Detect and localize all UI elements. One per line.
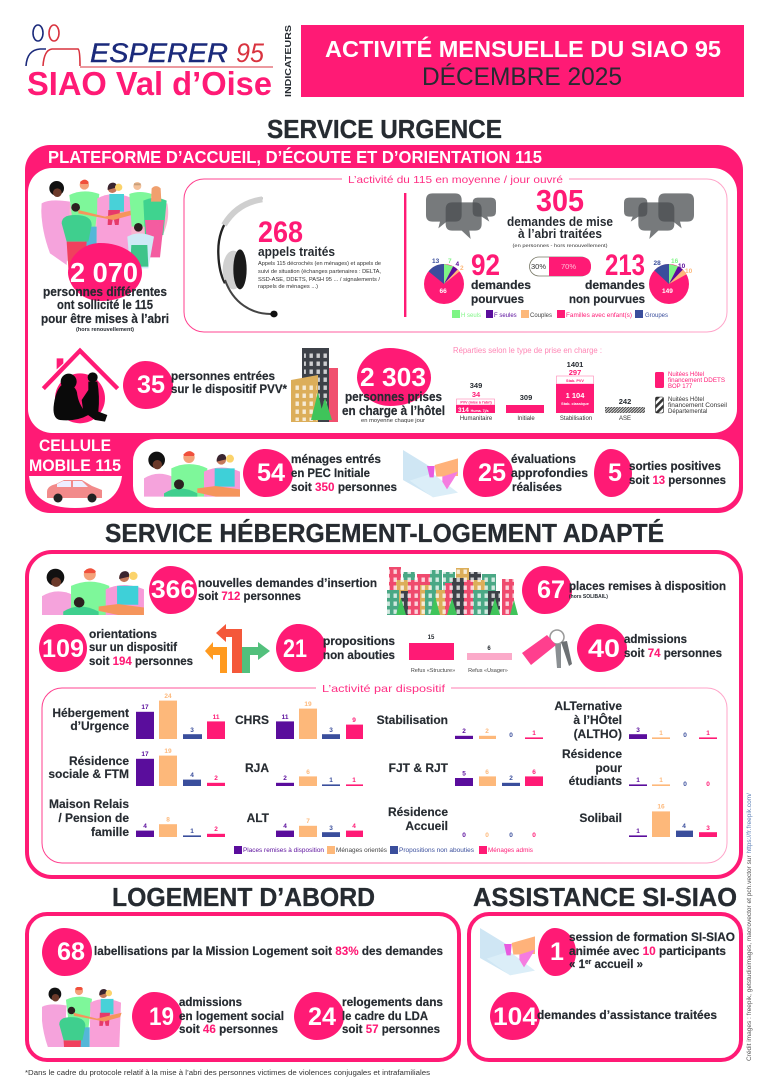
pie chart: demandes pourvues: 66 bbox=[440, 288, 447, 295]
chart: refus: Refus «Structure» bbox=[411, 668, 455, 674]
icon: headset bbox=[218, 198, 278, 317]
chart: répartition par type de prise en charge: 349 bbox=[470, 381, 482, 390]
stat: 305 demandes: demandes de mise bbox=[507, 215, 613, 229]
chart: solibail: 3 bbox=[706, 825, 710, 832]
stat: 305 demandes bbox=[507, 183, 613, 248]
legend: financement hôtel: financement Conseil bbox=[668, 403, 727, 409]
stat: 213 demandes non pourvues: non pourvues bbox=[569, 292, 645, 306]
chart: refus: Refus «Usager» bbox=[468, 668, 508, 674]
gauge: 30% 70%: 30% bbox=[531, 262, 546, 271]
chart: résidence accueil: 0 bbox=[532, 832, 536, 839]
chart: résidence sociale: sociale & FTM bbox=[48, 767, 129, 781]
legend: financement hôtel: Nuitées Hôtel bbox=[668, 397, 704, 403]
chart: répartition par type de prise en charge: 309 bbox=[520, 393, 532, 402]
legend: financement hôtel: Départemental bbox=[668, 409, 707, 415]
stat: 305 demandes: (en personnes - hors renouvellement) bbox=[512, 243, 608, 248]
stat: 109 orientations: orientations bbox=[89, 627, 157, 641]
image credits: Crédit images : freepik, getstudioimages, macrovector et pch.vector sur https://fr.freepik.com/ bbox=[746, 793, 753, 1061]
stat: 35 personnes PVV bbox=[123, 361, 287, 409]
logo: Espérer 95 SIAO Val d'Oise: ESPERER bbox=[90, 38, 228, 68]
chart: stabilisation: 2 bbox=[485, 728, 489, 735]
chart: RJA: 1 bbox=[329, 777, 333, 784]
chart: répartition par type de prise en charge: 34 bbox=[472, 390, 481, 399]
chart: ALTHO: ALTernative bbox=[554, 699, 622, 713]
chart: ALT: ALT bbox=[247, 811, 270, 825]
chart: répartition par type de prise en charge: Initiale bbox=[517, 416, 535, 422]
chart: ALTHO: à l’HÔtel bbox=[573, 712, 622, 727]
chart: CHRS bbox=[235, 701, 363, 739]
icon: laptop bbox=[403, 450, 458, 497]
chart: CHRS: CHRS bbox=[235, 713, 269, 727]
chart: RJA: RJA bbox=[245, 761, 269, 775]
stat: 2 070 personnes: 2 070 bbox=[70, 257, 138, 288]
pie chart: demandes non pourvues: 28 bbox=[654, 260, 661, 267]
stat: 67 places: places remises à disposition bbox=[569, 579, 726, 593]
logo: Espérer 95 SIAO Val d'Oise bbox=[26, 25, 273, 102]
stat: 92 demandes pourvues: pourvues bbox=[471, 292, 524, 306]
legend: ménages: Familles avec enfant(s) bbox=[566, 313, 632, 319]
chart: ALTHO bbox=[554, 699, 717, 741]
chart: hébergement d'urgence: 3 bbox=[190, 727, 194, 734]
legend: financement hôtel: Nuitées Hôtel bbox=[668, 372, 704, 378]
chart: résidence accueil: 0 bbox=[509, 832, 513, 839]
label: indicateurs: INDICATEURS bbox=[283, 25, 293, 97]
chart: résidence pour étudiants bbox=[562, 747, 710, 788]
chart: maison relais: Maison Relais bbox=[49, 797, 129, 811]
chart: ALT: 7 bbox=[306, 818, 310, 825]
pie chart: demandes pourvues: 2 bbox=[460, 265, 464, 272]
gauge: 30% 70%: 70% bbox=[561, 262, 576, 271]
panel: cellule mobile 115 bbox=[29, 436, 739, 508]
panel: logement d'abord bbox=[27, 914, 459, 1064]
stat: 1 session de formation: animée avec 10 participants bbox=[569, 944, 726, 958]
legend: financement hôtel bbox=[655, 372, 727, 415]
chart: résidence pour étudiants: 0 bbox=[706, 781, 710, 788]
pie chart: demandes non pourvues: 16 bbox=[671, 258, 679, 265]
stat: 25 évaluations: évaluations bbox=[511, 452, 576, 466]
stat: 19 admissions: soit 46 personnes bbox=[179, 1022, 278, 1036]
stat: 2 303 personnes à l'hôtel bbox=[342, 348, 445, 424]
pie chart: demandes non pourvues: 149 bbox=[662, 288, 673, 295]
chart: ALT: 3 bbox=[329, 825, 333, 832]
stat: 104 demandes d'assistance: 104 bbox=[493, 1003, 537, 1031]
chart: répartition par type de prise en charge: Humanitaire bbox=[460, 416, 493, 422]
stat: 25 évaluations bbox=[463, 449, 588, 497]
chart: stabilisation: 1 bbox=[532, 730, 536, 737]
chart: ALTHO: (ALTHO) bbox=[574, 727, 622, 741]
chart: maison relais: famille bbox=[91, 825, 129, 839]
chart: CHRS: 19 bbox=[304, 701, 312, 708]
stat: 1 session de formation: « 1 bbox=[569, 957, 586, 971]
stat: 1 session de formation: 1 bbox=[550, 938, 564, 966]
pie chart: demandes non pourvues: 10 bbox=[685, 268, 693, 275]
heading: plateforme 115: PLATEFORME D’ACCUEIL, D’ÉCOUTE ET D’ORIENTATION 115 bbox=[48, 146, 542, 167]
chart: ALT: 4 bbox=[352, 823, 356, 830]
chart: CHRS: 9 bbox=[352, 717, 356, 724]
panel: activité par dispositif bbox=[42, 681, 727, 863]
stat: 68 labellisations: labellisations par la Mission Logement soit 83% des demandes bbox=[94, 944, 443, 958]
heading: service hébergement: SERVICE HÉBERGEMENT-LOGEMENT ADAPTÉ bbox=[105, 519, 664, 548]
icon: hotel buildings bbox=[291, 348, 338, 422]
panel: assistance SI-SIAO bbox=[469, 914, 741, 1060]
panel: activité 115 moyenne bbox=[184, 172, 727, 332]
legend: dispositifs: Ménages orientés bbox=[336, 848, 387, 854]
stat: 268 appels traités: 268 bbox=[258, 216, 303, 249]
stat: 21 propositions: propositions bbox=[323, 634, 395, 648]
stat: 68 labellisations bbox=[42, 928, 443, 976]
stat: 109 orientations: soit 194 personnes bbox=[89, 654, 193, 668]
pie chart: demandes pourvues: 4 bbox=[456, 261, 460, 268]
pie chart: demandes pourvues: 13 bbox=[432, 258, 440, 265]
chart: répartition par type de prise en charge: Réparties selon le type de prise en charge : bbox=[453, 346, 602, 355]
stat: 25 évaluations: approfondies bbox=[511, 466, 588, 480]
stat: 25 évaluations: 25 bbox=[478, 459, 506, 487]
chart: résidence sociale: Résidence bbox=[69, 754, 129, 768]
panel: hébergement logement adapté bbox=[27, 552, 741, 877]
chart: refus: 6 bbox=[487, 646, 491, 652]
chart: maison relais: 8 bbox=[166, 816, 170, 824]
stat: 21 propositions bbox=[276, 624, 395, 672]
chart: résidence sociale: 19 bbox=[164, 748, 172, 755]
panel: cellule mobile 115: MOBILE 115 bbox=[29, 456, 121, 475]
chart: hébergement d'urgence: 17 bbox=[141, 704, 149, 711]
legend: ménages: H seuls bbox=[461, 313, 481, 319]
stat: 268 appels traités: SSD-ASE, DDETS, PASH 95 ... / signalements / bbox=[258, 277, 381, 283]
chart: solibail: Solibail bbox=[579, 811, 622, 825]
stat: 19 admissions: admissions bbox=[179, 995, 242, 1009]
stat: 40 admissions: admissions bbox=[624, 632, 687, 646]
icon: house with mother and child bbox=[43, 351, 118, 423]
stat: 67 places: 67 bbox=[537, 576, 565, 604]
chart: résidence pour étudiants: étudiants bbox=[569, 774, 622, 788]
illustration: family bbox=[144, 451, 240, 497]
stat: 92 demandes pourvues: 92 bbox=[471, 249, 500, 282]
stat: 2 303 personnes à l'hôtel: personnes prises bbox=[345, 390, 442, 404]
chart: ALT bbox=[247, 811, 363, 837]
chart: maison relais: / Pension de bbox=[58, 811, 129, 825]
chart: maison relais: 2 bbox=[214, 826, 218, 833]
stat: 268 appels traités: rappels de ménages ...) bbox=[258, 284, 318, 290]
chart: hébergement d'urgence: 11 bbox=[213, 714, 220, 721]
legend: dispositifs: Places remises à disposition bbox=[243, 848, 324, 854]
legend: financement hôtel: BOP 177 bbox=[668, 384, 693, 390]
stat: 25 évaluations: réalisées bbox=[512, 480, 562, 494]
legend: dispositifs bbox=[234, 846, 533, 854]
stat: 2 070 personnes: personnes différentes bbox=[43, 285, 167, 299]
stat: 54 ménages: 54 bbox=[257, 459, 285, 487]
stat: 40 admissions: soit 74 personnes bbox=[624, 646, 722, 660]
stat: 67 places bbox=[522, 566, 726, 614]
stat: 305 demandes: à l’abri traitées bbox=[518, 227, 602, 241]
chart: hébergement d'urgence: Hébergement bbox=[52, 706, 129, 720]
pie chart: demandes non pourvues: 10 bbox=[678, 263, 686, 270]
stat: 2 070 personnes: ont sollicité le 115 bbox=[57, 298, 153, 312]
chart: répartition par type de prise en charge: 297 bbox=[569, 368, 581, 377]
chart: RJA: 2 bbox=[283, 775, 287, 782]
chart: FJT et RJT: 2 bbox=[509, 775, 513, 782]
stat: 366 demandes bbox=[149, 566, 377, 614]
stat: 109 orientations bbox=[39, 624, 193, 672]
stat: 305 demandes: 305 bbox=[536, 183, 584, 218]
stat: 19 admissions bbox=[132, 992, 284, 1040]
chart: résidence accueil: Accueil bbox=[405, 819, 448, 833]
stat: 1 session de formation bbox=[538, 928, 735, 976]
stat: 40 admissions: 40 bbox=[588, 635, 620, 663]
chart: répartition par type de prise en charge: 1 104 bbox=[566, 391, 585, 400]
stat: 35 personnes PVV: personnes entrées bbox=[171, 369, 275, 383]
stat: 21 propositions: non abouties bbox=[323, 648, 395, 662]
heading: service urgence: SERVICE URGENCE bbox=[267, 116, 502, 144]
heading: assistance SI-SIAO: ASSISTANCE SI-SIAO bbox=[473, 884, 737, 912]
stat: 1 session de formation: accueil » bbox=[591, 957, 643, 971]
chart: résidence sociale: 2 bbox=[214, 775, 218, 782]
icon: laptop bbox=[480, 928, 535, 975]
panel: service urgence bbox=[25, 145, 743, 513]
title banner: ACTIVITÉ MENSUELLE DU SIAO 95 bbox=[325, 35, 721, 62]
title banner bbox=[301, 25, 744, 97]
chart: stabilisation: Stabilisation bbox=[377, 713, 448, 727]
stat: 104 demandes d'assistance bbox=[490, 992, 717, 1040]
stat: 213 demandes non pourvues: 213 bbox=[605, 249, 645, 282]
chart: ALTHO: 3 bbox=[636, 727, 640, 734]
stat: 19 admissions: 19 bbox=[149, 1003, 174, 1031]
chart: ALT: 4 bbox=[283, 823, 287, 830]
stat: 24 relogements: relogements dans bbox=[342, 995, 443, 1009]
panel: activité 115 moyenne: L’activité du 115 en moyenne / jour ouvré bbox=[348, 174, 563, 186]
chart: hébergement d'urgence bbox=[52, 693, 225, 739]
chart: répartition par type de prise en charge: Stab. PVV bbox=[566, 379, 584, 383]
heading: logement d'abord: LOGEMENT D’ABORD bbox=[112, 884, 375, 912]
stat: 67 places: (hors SOLIBAIL) bbox=[569, 594, 608, 600]
stat: 268 appels traités: appels traités bbox=[258, 245, 335, 259]
chart: RJA: 6 bbox=[306, 769, 310, 776]
stat: 268 appels traités: suivi de situation (échanges partenaires : DELTA, bbox=[258, 269, 382, 275]
legend: ménages: F seules bbox=[494, 313, 517, 319]
legend: ménages bbox=[452, 310, 668, 319]
chart: résidence sociale: 4 bbox=[190, 772, 194, 779]
chart: hébergement d'urgence: d’Urgence bbox=[70, 719, 129, 733]
logo: Espérer 95 SIAO Val d'Oise: 95 bbox=[236, 38, 265, 68]
chart: maison relais: 1 bbox=[190, 828, 194, 835]
stat: 40 admissions bbox=[577, 624, 722, 672]
stat: 5 sorties positives: 5 bbox=[608, 459, 622, 487]
chart: résidence sociale bbox=[48, 748, 225, 786]
illustration: city bbox=[387, 567, 518, 615]
stat: 5 sorties positives bbox=[594, 449, 726, 497]
stat: 35 personnes PVV: 35 bbox=[137, 371, 165, 399]
title banner: DÉCEMBRE 2025 bbox=[422, 62, 622, 91]
icon: speech bubbles right bbox=[624, 193, 694, 239]
stat: 24 relogements: 24 bbox=[308, 1003, 336, 1031]
chart: résidence accueil: 0 bbox=[462, 832, 466, 839]
icon: keys bbox=[522, 630, 572, 668]
chart: répartition par type de prise en charge bbox=[453, 346, 645, 422]
chart: résidence sociale: 17 bbox=[141, 751, 149, 758]
stat: 2 070 personnes: pour être mises à l’abri bbox=[41, 312, 169, 326]
chart: ALTHO: 1 bbox=[659, 730, 663, 737]
chart: répartition par type de prise en charge: 242 bbox=[619, 397, 631, 406]
legend: financement hôtel: financement DDETS bbox=[668, 378, 725, 384]
chart: FJT et RJT: FJT & RJT bbox=[389, 761, 449, 775]
chart: résidence pour étudiants: 1 bbox=[636, 777, 640, 784]
stat: 24 relogements: le cadre du LDA bbox=[342, 1009, 428, 1023]
icon: speech bubbles left bbox=[426, 193, 496, 239]
stat: 109 orientations: sur un dispositif bbox=[89, 640, 178, 654]
stat: 104 demandes d'assistance: demandes d’assistance traitées bbox=[537, 1008, 717, 1022]
chart: refus bbox=[409, 635, 512, 674]
chart: FJT et RJT bbox=[389, 761, 543, 786]
chart: résidence pour étudiants: Résidence bbox=[562, 747, 622, 761]
stat: 21 propositions: 21 bbox=[283, 635, 307, 663]
chart: CHRS: 3 bbox=[329, 727, 333, 734]
chart: hébergement d'urgence: 24 bbox=[164, 693, 172, 700]
chart: répartition par type de prise en charge: ASE bbox=[619, 416, 631, 422]
stat: 268 appels traités: Appels 115 décrochés (en ménages) et appels de bbox=[258, 261, 381, 267]
stat: 2 303 personnes à l'hôtel: en charge à l’hôtel bbox=[342, 404, 445, 418]
chart: solibail bbox=[579, 804, 717, 837]
chart: FJT et RJT: 6 bbox=[532, 769, 536, 776]
stat: 92 demandes pourvues bbox=[471, 249, 531, 306]
pie chart: demandes pourvues: 7 bbox=[448, 258, 452, 265]
stat: 213 demandes non pourvues: demandes bbox=[585, 278, 645, 292]
stat: 54 ménages: en PEC Initiale bbox=[291, 466, 370, 480]
pie chart: demandes non pourvues bbox=[649, 258, 693, 304]
pie chart: demandes pourvues bbox=[424, 258, 464, 304]
stat: 24 relogements: soit 57 personnes bbox=[342, 1022, 440, 1036]
stat: 5 sorties positives: sorties positives bbox=[629, 459, 721, 473]
chart: répartition par type de prise en charge: 1401 bbox=[567, 360, 583, 369]
stat: 366 demandes: soit 712 personnes bbox=[198, 589, 301, 603]
chart: répartition par type de prise en charge: Stabilisation bbox=[560, 416, 592, 422]
chart: stabilisation: 0 bbox=[509, 732, 513, 739]
chart: résidence accueil bbox=[388, 805, 536, 839]
chart: refus: 15 bbox=[428, 635, 435, 641]
stat: 5 sorties positives: soit 13 personnes bbox=[629, 473, 726, 487]
icon: direction arrows bbox=[205, 624, 270, 673]
icon: car bbox=[47, 480, 102, 502]
chart: résidence pour étudiants: 1 bbox=[659, 777, 663, 784]
chart: stabilisation bbox=[377, 713, 543, 739]
stat: 1 session de formation: session de formation SI-SIAO bbox=[569, 930, 735, 944]
chart: résidence pour étudiants: pour bbox=[595, 761, 622, 775]
chart: maison relais: 4 bbox=[143, 823, 147, 830]
stat: 366 demandes: nouvelles demandes d’insertion bbox=[198, 576, 377, 590]
legend: ménages: Groupes bbox=[645, 313, 668, 319]
chart: FJT et RJT: 5 bbox=[462, 770, 466, 778]
stat: 35 personnes PVV: sur le dispositif PVV* bbox=[171, 382, 287, 396]
legend: dispositifs: Propositions non abouties bbox=[399, 848, 474, 854]
stat: 2 303 personnes à l'hôtel: 2 303 bbox=[360, 362, 426, 392]
stat: 92 demandes pourvues: demandes bbox=[471, 278, 531, 292]
stat: 366 demandes: 366 bbox=[151, 576, 195, 604]
stat: 54 ménages bbox=[243, 449, 397, 497]
chart: répartition par type de prise en charge: 314 Huma. 7j/s bbox=[458, 407, 489, 414]
chart: solibail: 1 bbox=[636, 828, 640, 835]
illustration: family bbox=[42, 568, 144, 615]
stat: 19 admissions: en logement social bbox=[179, 1009, 284, 1023]
gauge: 30% 70% bbox=[530, 257, 591, 276]
chart: CHRS: 11 bbox=[282, 714, 289, 721]
legend: dispositifs: Ménages admis bbox=[488, 848, 533, 854]
chart: FJT et RJT: 6 bbox=[485, 769, 489, 776]
logo: Espérer 95 SIAO Val d'Oise: SIAO Val d’Oise bbox=[27, 65, 272, 102]
legend: ménages: Couples bbox=[530, 313, 552, 319]
panel: activité par dispositif: L’activité par dispositif bbox=[322, 683, 445, 695]
stat: 68 labellisations: 68 bbox=[57, 938, 85, 966]
illustration: family bbox=[42, 987, 122, 1047]
stat: 2 070 personnes: (hors renouvellement) bbox=[76, 327, 134, 333]
stat: 2 303 personnes à l'hôtel: en moyenne chaque jour bbox=[361, 418, 425, 424]
illustration: people heart bbox=[41, 180, 168, 285]
stat: 54 ménages: ménages entrés bbox=[291, 452, 381, 466]
chart: ALTHO: 0 bbox=[683, 732, 687, 739]
stat: 109 orientations: 109 bbox=[42, 635, 84, 663]
chart: répartition par type de prise en charge: PVV (mise à l’abri) bbox=[460, 400, 492, 404]
chart: solibail: 16 bbox=[657, 804, 665, 810]
chart: RJA: 1 bbox=[352, 777, 356, 784]
chart: résidence pour étudiants: 0 bbox=[683, 781, 687, 788]
chart: RJA bbox=[245, 761, 363, 786]
chart: maison relais bbox=[49, 797, 225, 839]
chart: répartition par type de prise en charge: Stab. classique bbox=[561, 402, 589, 406]
stat: 2 070 personnes bbox=[41, 243, 169, 333]
chart: résidence accueil: Résidence bbox=[388, 805, 448, 819]
footnote: *Dans le cadre du protocole relatif à la mise à l’abri des personnes victimes de violences conjugales et intrafamiliales bbox=[25, 1070, 431, 1077]
chart: solibail: 4 bbox=[682, 823, 686, 830]
stat: 1 session de formation: er bbox=[585, 959, 592, 966]
panel: cellule mobile 115: CELLULE bbox=[39, 436, 111, 455]
stat: 268 appels traités bbox=[258, 216, 382, 290]
stat: 213 demandes non pourvues bbox=[569, 249, 645, 306]
stat: 54 ménages: soit 350 personnes bbox=[291, 480, 397, 494]
stat: 24 relogements bbox=[294, 992, 443, 1040]
chart: ALTHO: 1 bbox=[706, 730, 710, 737]
chart: résidence accueil: 0 bbox=[485, 832, 489, 839]
chart: stabilisation: 2 bbox=[462, 728, 466, 735]
